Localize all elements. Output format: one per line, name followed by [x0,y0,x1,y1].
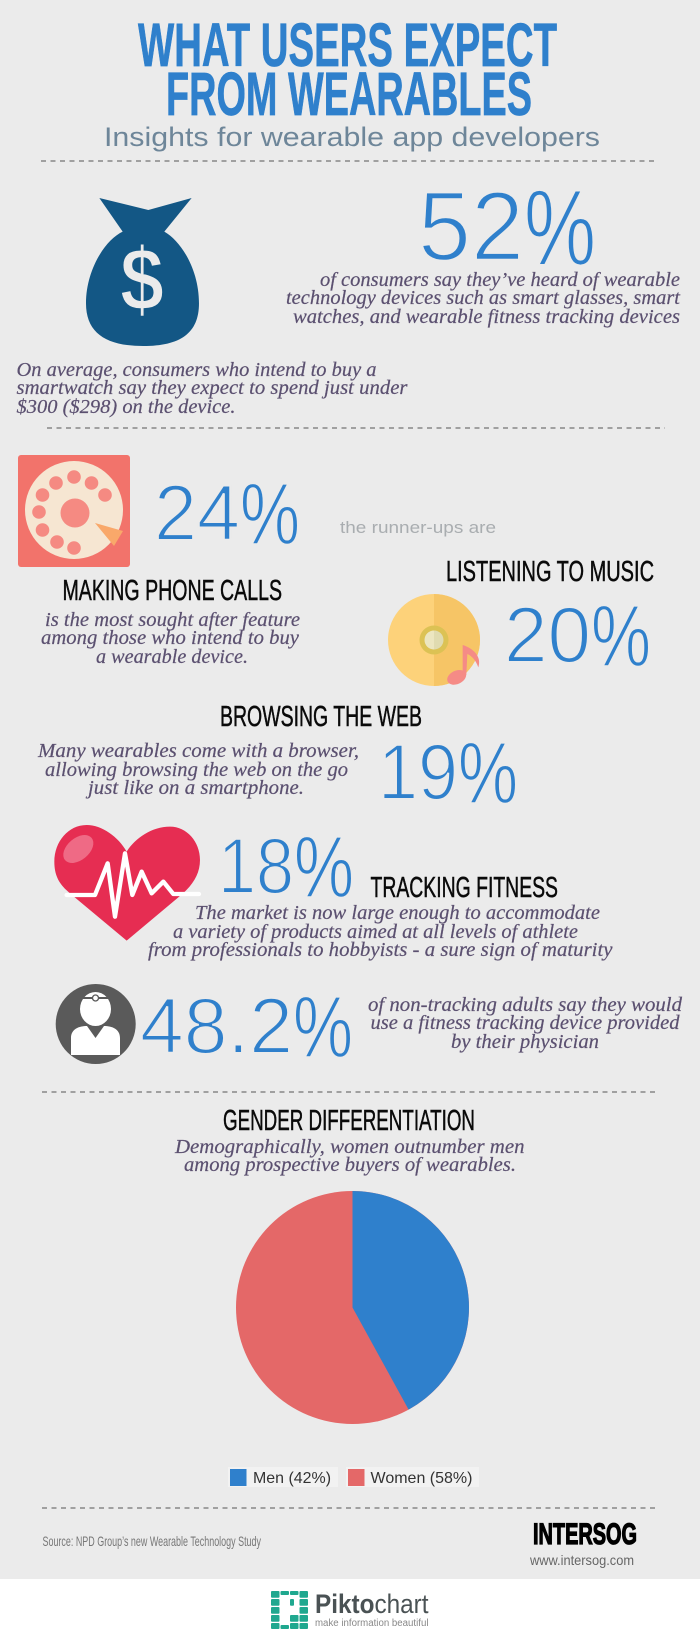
text: fitness market: The market is now large enough to accommodate [195,902,600,924]
stat: 48.2%: % [293,979,353,1076]
stat: 52%: 52 [418,171,524,281]
subtitle: Insights for wearable app developers [104,122,600,152]
heading: browsing the web: BROWSING THE WEB [220,701,422,733]
text: browsing: Many wearables come with a browser, [37,740,359,762]
heading: making phone calls: MAKING PHONE CALLS [62,575,282,607]
legend: Men (42%) [253,1470,331,1487]
stat: 48.2% [140,979,353,1076]
stat: 19% [378,725,518,822]
stat: 19%: 19 [378,727,458,816]
title [138,11,557,128]
stat: 48.2%: 48.2 [140,981,293,1070]
text: physician: use a fitness tracking device provided [370,1012,680,1034]
stat: 19%: % [458,725,518,822]
text: physician: of non-tracking adults say they would [368,994,683,1016]
icon: money bag: $ [120,229,164,329]
stat: 18%: % [294,819,354,916]
logo: intersog: INTERSOG [533,1518,637,1551]
stat: 20% [504,588,651,685]
stat: 18%: 18 [218,821,294,910]
stat: 52% [418,167,596,288]
text: fitness market [148,902,613,961]
text: phone calls [41,609,300,668]
text: average spend: smartwatch say they expect to spend just under [16,377,409,399]
icon: rotary phone [18,455,130,567]
text: the runner-ups are: the runner-ups are [340,518,496,537]
text: heard of wearables [286,269,681,328]
heading: gender differentiation: GENDER DIFFERENTIATION [223,1105,475,1137]
text: average spend: On average, consumers who intend to buy a [16,359,376,381]
text: browsing: allowing browsing the web on the go [45,759,348,781]
text: demographics [174,1136,524,1176]
pie chart [236,1191,469,1424]
text: phone calls: is the most sought after feature [45,609,300,631]
text: fitness market: a variety of products aimed at all levels of athlete [173,921,578,943]
stat: 52%: % [524,167,596,288]
logo: piktochart: Piktochart [315,1589,429,1619]
text: average spend [16,359,409,418]
text: demographics: among prospective buyers of wearables. [184,1154,516,1176]
text: physician: by their physician [451,1031,599,1053]
text: physician [368,994,683,1053]
stat: 24%: % [240,466,300,563]
text: heard of wearables: watches, and wearable fitness tracking devices [293,306,680,328]
heading: tracking fitness: TRACKING FITNESS [370,872,558,904]
icon: money bag [86,198,199,346]
legend: Women (58%) [370,1470,472,1487]
source note: Source: NPD Group’s new Wearable Technology Study [42,1533,261,1549]
website: www.intersog.com [529,1552,634,1568]
stat: 20%: % [591,588,651,685]
text: phone calls: a wearable device. [96,646,248,668]
text: average spend: $300 ($298) on the device. [16,396,236,418]
stat: 20%: 20 [504,590,591,679]
text: heard of wearables: of consumers say they’ve heard of wearable [320,269,680,291]
text: fitness market: from professionals to hobbyists - a sure sign of maturity [148,939,613,961]
text: demographics: Demographically, women outnumber men [174,1136,524,1158]
icon: heart with pulse [54,825,200,941]
legend [228,1467,479,1487]
text: heard of wearables: technology devices such as smart glasses, smart [286,287,681,309]
text: browsing [37,740,359,799]
stat: 24% [154,466,300,563]
text: phone calls: among those who intend to buy [41,627,300,649]
icon: doctor [56,984,136,1064]
text: browsing: just like on a smartphone. [85,777,304,799]
icon: music disc [388,594,480,688]
logo: piktochart [271,1589,429,1629]
logo: piktochart: make information beautiful [315,1618,428,1629]
stat: 18% [218,819,354,916]
stat: 24%: 24 [154,468,240,557]
